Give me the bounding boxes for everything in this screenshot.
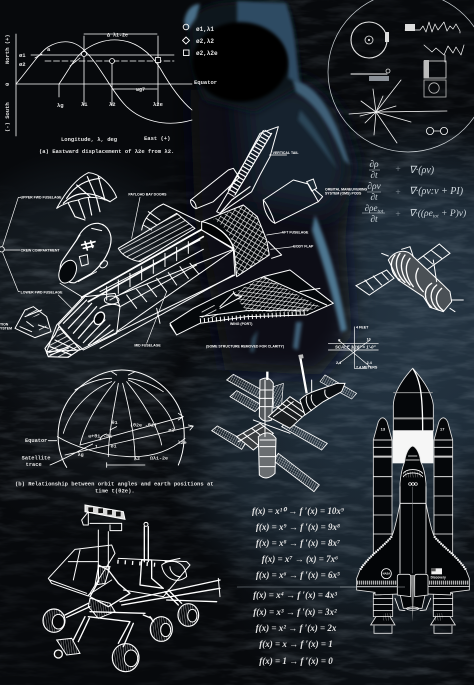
globe: orbit angles: 1 xyxy=(95,444,98,450)
derivative formulas: f(x) = x⁸ → f ′(x) = 8x⁷ xyxy=(256,538,341,548)
shuttle labels: PAYLOAD BAY DOORS xyxy=(128,193,167,197)
legend: orbit points: ø2,λ2e xyxy=(196,50,218,57)
equations: conservation laws: ∇·((ρe xyxy=(409,209,433,219)
wheels xyxy=(43,604,199,672)
equations: conservation laws: ∂t xyxy=(370,193,378,203)
globe: orbit angles: trace xyxy=(26,462,42,468)
scale bar xyxy=(328,325,378,369)
shuttle labels: YSTEM xyxy=(0,327,12,331)
tail fin: VERTICAL TAIL xyxy=(273,151,299,155)
derivative formulas: f(x) = x³ → f ′(x) = 3x² xyxy=(253,607,337,617)
chart: eastward displacement: λ2 xyxy=(109,101,116,108)
equations: conservation laws: + xyxy=(395,165,401,175)
right solid rocket booster: 17 xyxy=(440,427,445,432)
shuttle labels: LOWER FWD FUSELAGE xyxy=(21,291,63,295)
crew compartment capsule xyxy=(55,223,111,297)
vertical tail and OMS pods xyxy=(191,127,368,223)
shuttle labels: TION xyxy=(0,323,9,327)
chart: eastward displacement: Longitude, λ, deg xyxy=(61,136,117,143)
shuttle labels: UPPER FWD FUSELAGE xyxy=(21,196,62,200)
right solid rocket booster xyxy=(431,418,455,633)
chart: eastward displacement: 0 xyxy=(4,83,11,86)
chart: eastward displacement xyxy=(4,32,217,155)
solar panels xyxy=(48,545,220,605)
equations: conservation laws: ∂ρ xyxy=(369,160,379,170)
space shuttle exploded diagram xyxy=(0,173,333,357)
mars rover xyxy=(43,505,220,672)
OMS pod left xyxy=(191,168,239,209)
globe: orbit angles: ø2 xyxy=(168,428,174,434)
camera mast xyxy=(82,505,148,570)
chart: eastward displacement: (-) South xyxy=(4,102,11,132)
equations: conservation laws: ∇·(ρv) xyxy=(409,165,435,176)
OMS pod right xyxy=(263,179,368,223)
shuttle labels: (SOME STRUCTURE REMOVED FOR CLARITY) xyxy=(206,344,284,348)
chart: eastward displacement: East (+) xyxy=(144,135,170,142)
scale bar: 4 FEET xyxy=(356,325,369,329)
chart: eastward displacement: a xyxy=(47,46,51,53)
legend: orbit points: ø1,λ1 xyxy=(196,26,214,33)
globe: orbit angles xyxy=(15,370,214,494)
globe: orbit angles: λ2 xyxy=(134,456,140,462)
OMS pod right: SYSTEM (OMS) PODS xyxy=(325,191,362,195)
space station xyxy=(212,354,357,492)
equations: conservation laws: ∂ρe xyxy=(365,203,377,213)
upper forward fuselage xyxy=(57,173,117,220)
derivative formulas: f(x) = x → f ′(x) = 1 xyxy=(259,639,333,649)
shuttle labels: BODY FLAP xyxy=(293,244,314,248)
derivative formulas: f(x) = x¹⁰ → f ′(x) = 10x⁹ xyxy=(252,506,344,516)
external tank xyxy=(393,368,433,463)
chart: eastward displacement: (a) Eastward displacement of λ2e from λ2. xyxy=(39,148,174,155)
nose section xyxy=(45,293,120,357)
globe: orbit angles: (θ2e -θ1) xyxy=(130,423,157,429)
equations: conservation laws: tot xyxy=(433,214,439,220)
globe: orbit angles: Equator xyxy=(25,438,47,444)
soyuz spacecraft xyxy=(356,244,463,312)
scale bar: 10 xyxy=(367,338,371,342)
scale bar: 2.4 METERS xyxy=(356,365,378,369)
equations: conservation laws: ∂t xyxy=(370,215,378,225)
scale bar: 2.4 xyxy=(367,361,373,365)
derivative formulas: f(x) = x⁹ → f ′(x) = 9x⁸ xyxy=(256,522,340,532)
mid fuselage xyxy=(47,229,235,352)
equations: conservation laws: ∂ρv xyxy=(367,182,382,192)
voyager golden record diagram xyxy=(328,0,474,152)
equations: conservation laws: ∂t xyxy=(370,171,378,181)
legend: orbit points: ø2,λ2 xyxy=(196,38,214,45)
derivative formulas: f(x) = x⁶ → f ′(x) = 6x⁵ xyxy=(256,570,340,580)
left solid rocket booster xyxy=(371,418,395,633)
chart: eastward displacement: ø2 xyxy=(19,61,26,68)
tail fin xyxy=(217,127,299,213)
derivative formulas: f(x) = x⁷ → (x) = 7x⁶ xyxy=(262,554,338,564)
equations: conservation laws: + xyxy=(395,188,401,198)
aft fuselage lattice xyxy=(202,205,282,277)
chart: eastward displacement: Δ λ1-2e xyxy=(107,32,128,38)
equations: conservation laws xyxy=(362,160,466,225)
rover body and high gain antenna xyxy=(65,558,187,647)
scale bar: 8 xyxy=(338,339,340,343)
equations: conservation laws: + xyxy=(395,210,401,220)
orbiting stations and scale xyxy=(212,244,463,492)
chart: eastward displacement: λg xyxy=(57,102,64,109)
equations: conservation laws: ∇·(ρv:v + PI) xyxy=(409,186,464,197)
derivative formulas: f(x) = x² → f ′(x) = 2x xyxy=(256,623,337,633)
globe: orbit angles: ø1 xyxy=(111,443,117,449)
globe: orbit angles: Ωλ1-2e xyxy=(150,455,168,461)
port wing lattice xyxy=(170,270,333,335)
globe: orbit angles: (b) Relationship between orbit angles and earth positions at xyxy=(15,480,214,487)
globe: orbit angles: θ1 xyxy=(112,420,118,426)
orbiter: Discovery xyxy=(431,575,446,579)
shuttle labels: MID FUSELAGE xyxy=(134,344,161,348)
astronaut photograph xyxy=(184,1,352,375)
forward reaction control module xyxy=(15,307,51,338)
OMS pod right: ORBITAL MANEUVERING xyxy=(325,187,368,191)
left solid rocket booster: 13 xyxy=(381,427,386,432)
equations: conservation laws: tot xyxy=(377,208,384,214)
globe: orbit angles: λg xyxy=(78,452,84,458)
derivative formulas xyxy=(237,506,405,666)
scale bar: 2.4 xyxy=(336,361,342,365)
orbiter: NASA xyxy=(383,572,390,576)
leader lines and node xyxy=(0,197,293,343)
shuttle labels: WING (PORT) xyxy=(230,322,252,326)
globe: orbit angles: time t(θ2e). xyxy=(95,487,135,494)
chart: eastward displacement: ø1 xyxy=(19,52,26,59)
chart: eastward displacement: Equator xyxy=(194,79,217,86)
equations: conservation laws: + P)v) xyxy=(439,208,466,219)
globe: orbit angles: ω+θ1 -θ1 xyxy=(88,434,112,440)
derivative formulas: f(x) = 1 → f ′(x) = 0 xyxy=(259,656,333,666)
space shuttle launch stack xyxy=(357,368,469,633)
globe: orbit angles: Satellite xyxy=(22,455,50,461)
shuttle labels: AFT FUSELAGE xyxy=(282,230,309,234)
derivative formulas: f(x) = x⁴ → f ′(x) = 4x³ xyxy=(253,590,337,600)
scale bar: SCALE 3/16" = 1'-0" xyxy=(335,344,377,349)
robot arm xyxy=(54,617,89,658)
chart: eastward displacement: λ2e xyxy=(153,101,164,108)
globe: orbit angles: λ2e xyxy=(178,440,187,446)
payload bay doors xyxy=(118,204,200,262)
chart: eastward displacement: North (+) xyxy=(4,34,11,64)
legend: orbit points xyxy=(182,24,218,57)
orbiter xyxy=(357,446,469,622)
chart: eastward displacement: ωg7 xyxy=(136,87,145,93)
shuttle labels: CREW COMPARTMENT xyxy=(21,248,60,252)
chart: eastward displacement: λ1 xyxy=(81,101,88,108)
shuttle labels xyxy=(0,193,314,348)
